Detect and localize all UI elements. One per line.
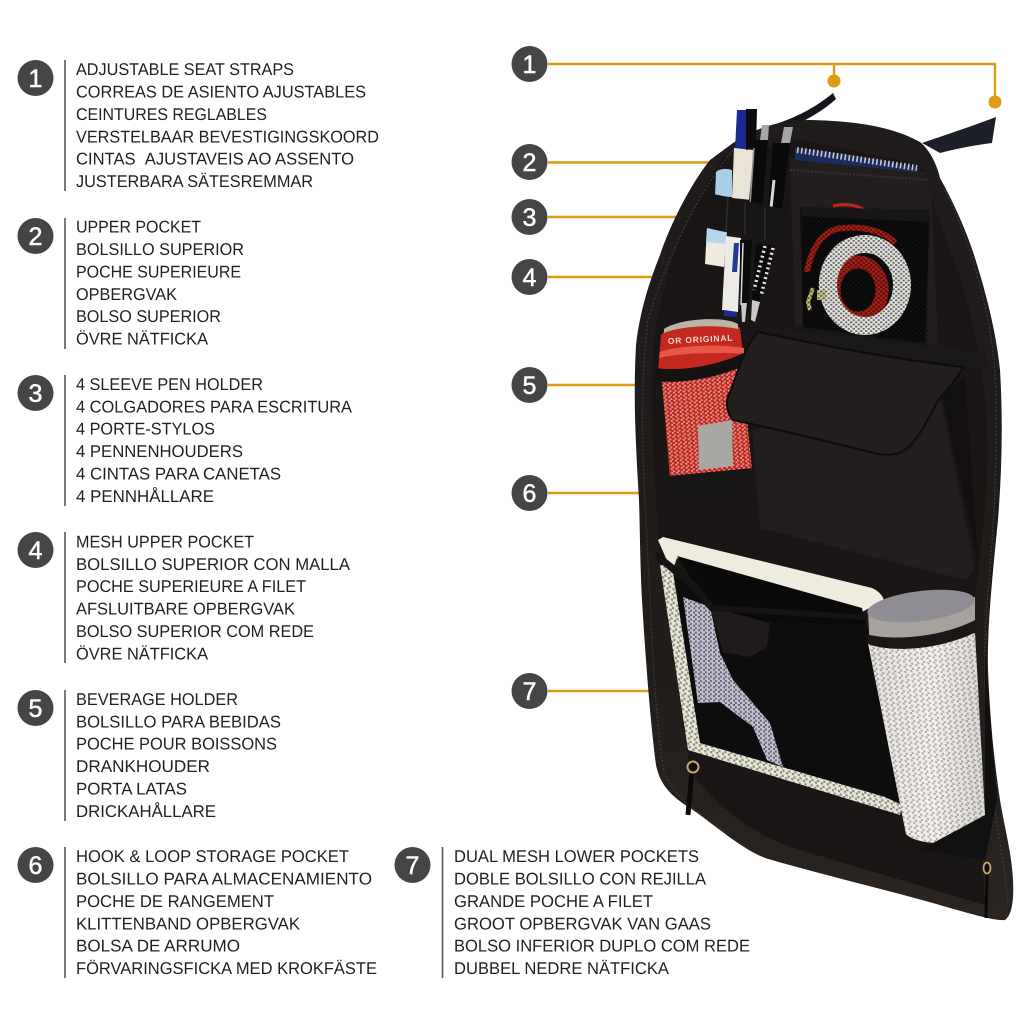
text block 1: JUSTERBARA SÄTESREMMAR (76, 172, 313, 191)
text block 5: DRICKAHÅLLARE (76, 802, 216, 821)
text block 5: PORTA LATAS (76, 779, 187, 798)
callout badge 4 (512, 259, 548, 295)
text block 4: BOLSILLO SUPERIOR CON MALLA (76, 555, 351, 574)
text block 2: UPPER POCKET (76, 217, 201, 236)
number badge 7: 7 (406, 852, 419, 880)
panel: bottle in mesh holder (866, 585, 997, 860)
icon: left grommet (688, 762, 698, 815)
text block 1: ADJUSTABLE SEAT STRAPS (76, 60, 294, 79)
legend 3: sleeve pen holder (18, 375, 353, 506)
panel: hook and loop storage pocket (727, 327, 988, 580)
text block 5: POCHE POUR BOISSONS (76, 734, 277, 753)
text block 2: ÖVRE NÄTFICKA (76, 329, 209, 348)
text block 1: VERSTELBAAR BEVESTIGINGSKOORD (76, 127, 379, 146)
callout badge 6: 6 (523, 480, 536, 508)
number badge 1: 1 (29, 65, 42, 93)
text block 7: DUBBEL NEDRE NÄTFICKA (454, 959, 670, 978)
legend 1: adjustable seat straps (18, 60, 379, 191)
text block 2: OPBERGVAK (76, 285, 178, 304)
text block 7: GRANDE POCHE A FILET (454, 892, 653, 911)
text block 1 (76, 60, 379, 191)
text block 5: DRANKHOUDER (76, 757, 210, 776)
text block 3: 4 SLEEVE PEN HOLDER (76, 375, 263, 394)
text block 3: 4 CINTAS PARA CANETAS (76, 464, 281, 483)
panel: beverage holder with can: OR ORIGINAL (668, 333, 733, 346)
text block 7 (454, 847, 750, 978)
callout leader lines (548, 64, 1002, 691)
callout badge 3: 3 (523, 204, 536, 232)
text block 4: BOLSO SUPERIOR COM REDE (76, 622, 314, 641)
text block 6: BOLSA DE ARRUMO (76, 936, 240, 955)
legend 5: beverage holder (18, 690, 281, 821)
callout badge 7 (512, 673, 548, 709)
text block 6: KLITTENBAND OPBERGVAK (76, 914, 301, 933)
number badge 3: 3 (29, 380, 42, 408)
text block 6: FÖRVARINGSFICKA MED KROKFÄSTE (76, 959, 377, 978)
text block 7: DOBLE BOLSILLO CON REJILLA (454, 869, 707, 888)
number badge 4 (18, 532, 54, 568)
text block 2: BOLSO SUPERIOR (76, 307, 221, 326)
panel: mesh upper pocket with cables (800, 205, 930, 345)
text block 7: GROOT OPBERGVAK VAN GAAS (454, 914, 711, 933)
text block 4: MESH UPPER POCKET (76, 532, 254, 551)
text block 2: BOLSILLO SUPERIOR (76, 240, 244, 259)
text block 3: 4 PENNENHOUDERS (76, 442, 243, 461)
number badge 6 (18, 847, 54, 883)
number badge 5 (18, 690, 54, 726)
text block 5 (76, 690, 281, 821)
seat organizer illustration (635, 93, 1013, 920)
text block 2 (76, 217, 244, 348)
number badge 4: 4 (29, 537, 43, 565)
callout badge 6 (512, 475, 548, 511)
text block 7: BOLSO INFERIOR DUPLO COM REDE (454, 936, 750, 955)
text block 4: ÖVRE NÄTFICKA (76, 644, 209, 663)
callout badge 2: 2 (523, 149, 536, 177)
icon: right grommet (984, 862, 990, 918)
text block 1: CORREAS DE ASIENTO AJUSTABLES (76, 82, 366, 101)
callout badge 7: 7 (523, 678, 536, 706)
legend 2: upper pocket (18, 217, 244, 349)
number badge 3 (18, 375, 54, 411)
number badge 2: 2 (29, 223, 42, 251)
text block 4: AFSLUITBARE OPBERGVAK (76, 599, 296, 618)
legend 6: hook and loop storage pocket (18, 847, 377, 978)
text block 2: POCHE SUPERIEURE (76, 262, 241, 281)
text block 7: DUAL MESH LOWER POCKETS (454, 847, 699, 866)
text block 3: 4 PORTE-STYLOS (76, 419, 215, 438)
text block 6 (76, 847, 377, 978)
text block 5: BEVERAGE HOLDER (76, 690, 238, 709)
legend 7: dual mesh lower pockets (394, 847, 750, 978)
panel: pen holder with pens (705, 109, 793, 322)
panel: beverage holder with can (656, 319, 752, 497)
number badge 7 (394, 847, 430, 883)
number badge 5: 5 (29, 695, 42, 723)
number badge 6: 6 (29, 852, 42, 880)
callout badge 3 (512, 199, 548, 235)
callout badge 1: 1 (523, 51, 536, 79)
callout badge 1 (512, 46, 548, 82)
text block 3 (76, 375, 353, 506)
flap with hook and loop closure (727, 332, 963, 455)
text block 5: BOLSILLO PARA BEBIDAS (76, 712, 281, 731)
text block 1: CEINTURES REGLABLES (76, 105, 267, 124)
number badge 1 (18, 60, 54, 96)
text block 3: 4 PENNHÅLLARE (76, 487, 214, 506)
callout badge 5 (512, 367, 548, 403)
text block 6: POCHE DE RANGEMENT (76, 892, 274, 911)
text block 4 (76, 532, 351, 663)
text block 3: 4 COLGADORES PARA ESCRITURA (76, 397, 353, 416)
legend 4: mesh upper pocket (18, 532, 351, 663)
panel: tablet in lower pocket (658, 537, 884, 626)
panel: upper pocket with notebook (790, 148, 938, 345)
callout badge 2 (512, 144, 548, 180)
panel: dual mesh lower pocket (655, 550, 902, 815)
number badge 2 (18, 218, 54, 254)
text block 1: CINTAS AJUSTAVEIS AO ASSENTO (76, 149, 354, 168)
text block 6: HOOK & LOOP STORAGE POCKET (76, 847, 349, 866)
callout badge 4: 4 (523, 264, 537, 292)
text block 4: POCHE SUPERIEURE A FILET (76, 577, 306, 596)
callout badge 5: 5 (523, 372, 536, 400)
text block 6: BOLSILLO PARA ALMACENAMIENTO (76, 869, 372, 888)
